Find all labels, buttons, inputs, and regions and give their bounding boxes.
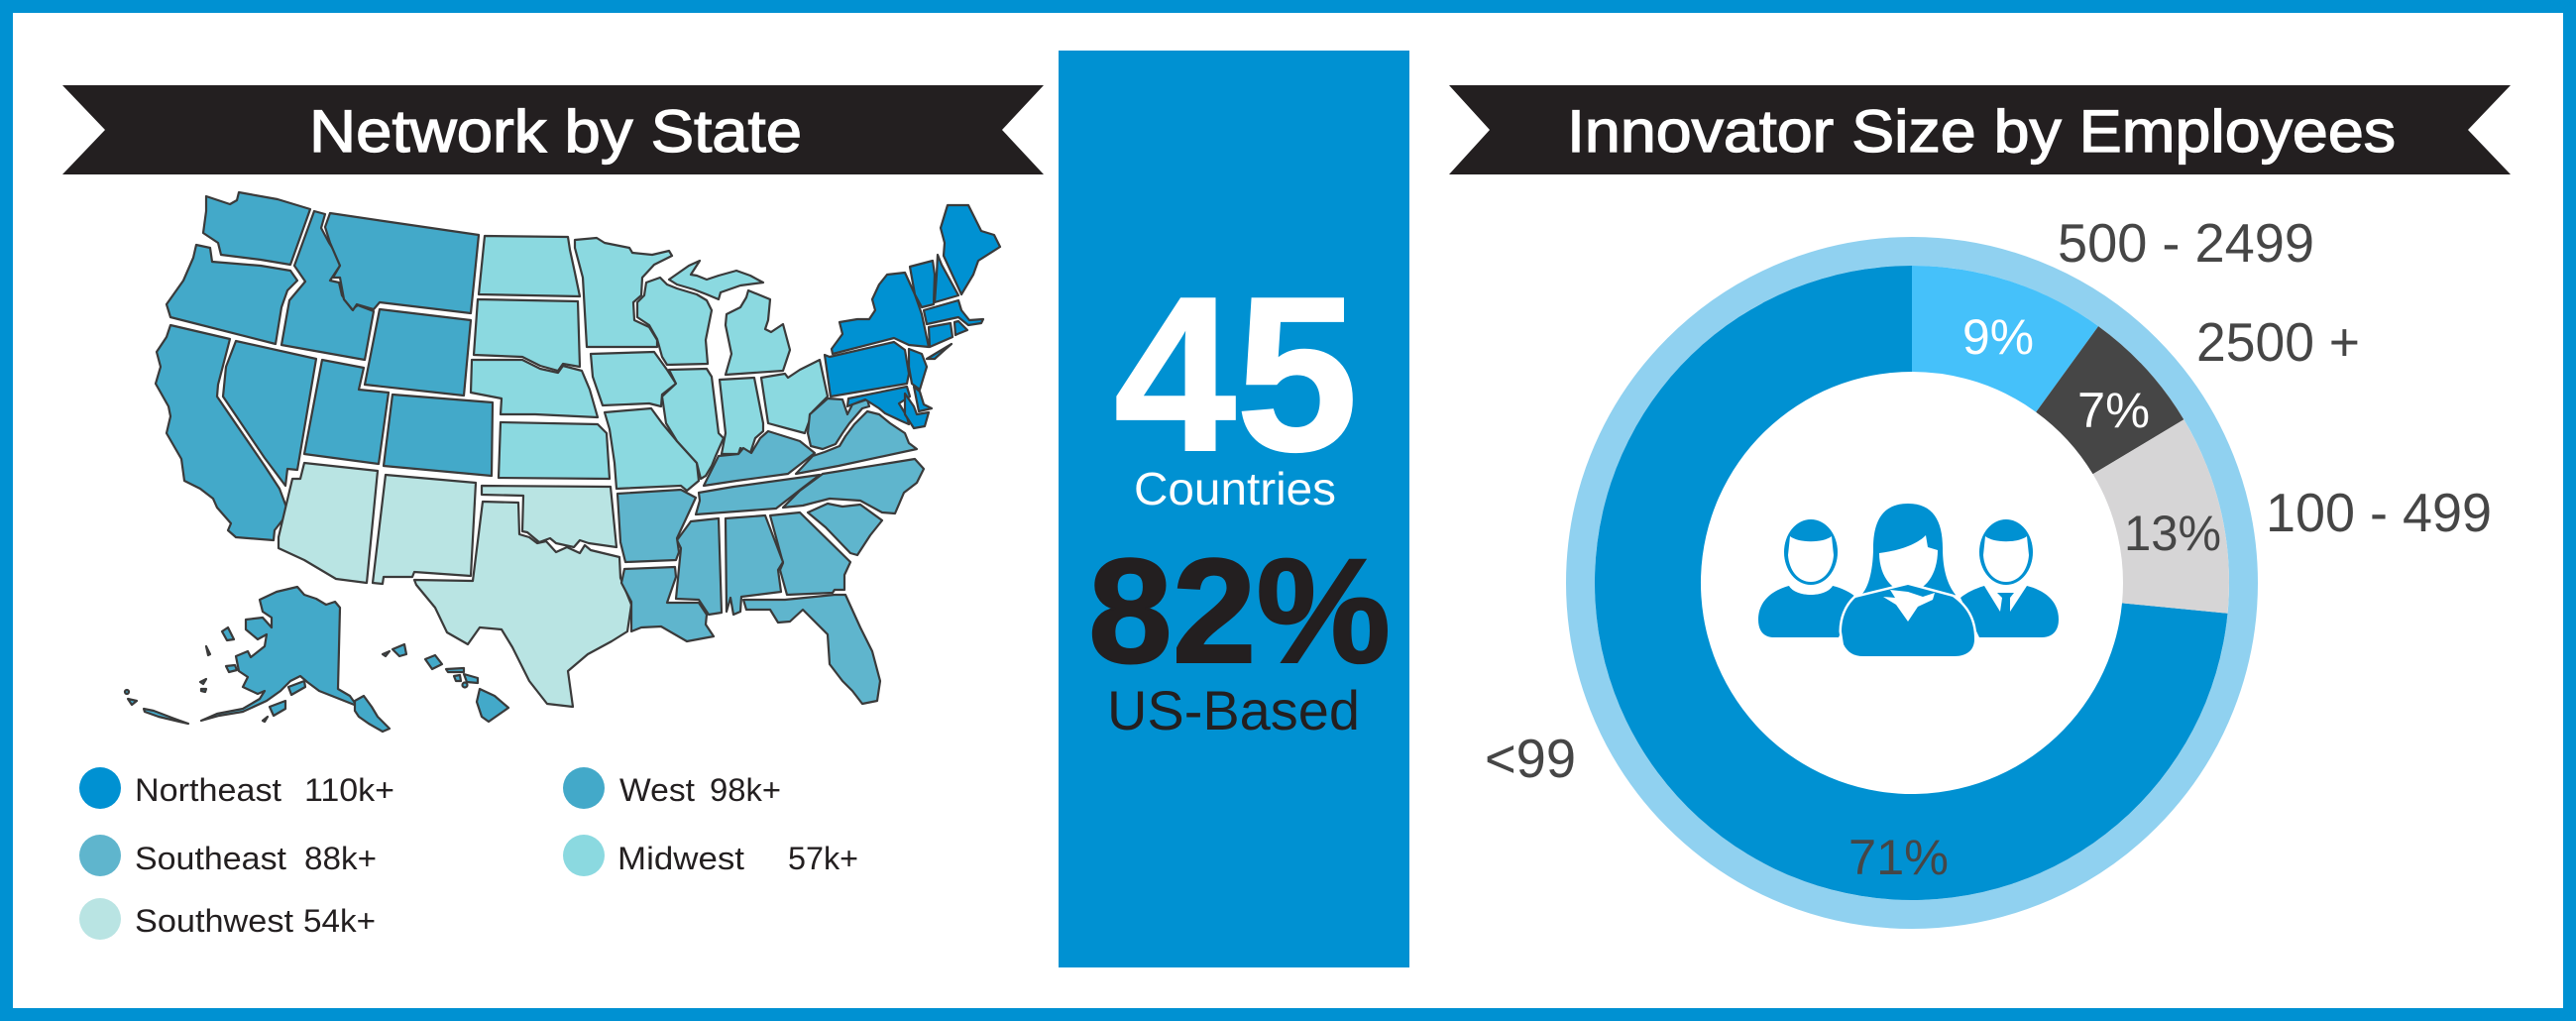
southeast states <box>617 398 924 704</box>
heading ribbon: Innovator Size by Employees: Innovator Size by Employees <box>1567 98 2396 165</box>
southwest states <box>279 463 631 707</box>
donut value labels: 9% <box>1962 309 2034 365</box>
woman <box>1842 504 1974 656</box>
midwest states <box>471 236 828 491</box>
heading ribbon: Network by State <box>62 85 1044 174</box>
segment: 2500+ 7% <box>2036 326 2184 474</box>
legend: southeast: Southeast <box>135 841 286 876</box>
legend: southeast: 88k+ <box>304 841 377 876</box>
segment: <99 71% <box>1595 266 2228 900</box>
stat: 45 countries: 45 <box>1114 252 1358 498</box>
legend: northeast: 110k+ <box>304 772 394 808</box>
donut chart <box>1580 252 2244 914</box>
donut value labels: 7% <box>2077 383 2150 438</box>
icon: three people <box>1758 504 2059 656</box>
category labels: 100 - 499 <box>2266 482 2492 543</box>
panel: network by state <box>62 85 1044 940</box>
west states <box>125 192 508 732</box>
legend: southwest: 54k+ <box>303 903 376 939</box>
donut value labels <box>1848 309 2221 885</box>
legend: west <box>563 767 781 809</box>
legend: west: West <box>619 772 695 808</box>
heading ribbon: Innovator Size by Employees <box>1449 85 2511 174</box>
category labels: 2500 + <box>2196 311 2360 373</box>
donut value labels: 13% <box>2124 506 2221 561</box>
northeast states <box>825 205 1000 428</box>
category labels <box>1485 212 2492 789</box>
legend: southeast <box>79 835 377 876</box>
panel: innovator size by employees <box>1449 85 2511 914</box>
segment: 100-499 13% <box>2093 419 2229 614</box>
left man <box>1758 519 1856 637</box>
legend: northeast: Northeast <box>135 772 281 808</box>
legend: midwest: 57k+ <box>788 841 858 876</box>
stat: 82% US-based: 82% <box>1088 527 1391 694</box>
legend: west: 98k+ <box>710 772 781 808</box>
map legend <box>79 767 858 940</box>
right man <box>1960 519 2059 637</box>
category labels: 500 - 2499 <box>2058 212 2314 274</box>
legend: midwest <box>563 835 858 876</box>
legend: southwest <box>79 898 376 940</box>
legend: southwest: Southwest <box>135 903 293 939</box>
segment: 500-2499 9% <box>1912 266 2098 412</box>
stat: 82% US-based: US-Based <box>1107 679 1360 741</box>
US map <box>125 192 1000 732</box>
stat: 45 countries: Countries <box>1134 463 1336 514</box>
legend: northeast <box>79 767 394 809</box>
category labels: <99 <box>1485 728 1576 789</box>
panel: central stats <box>1059 51 1409 967</box>
donut value labels: 71% <box>1848 830 1949 885</box>
heading ribbon: Network by State: Network by State <box>309 98 802 165</box>
legend: midwest: Midwest <box>617 841 744 876</box>
